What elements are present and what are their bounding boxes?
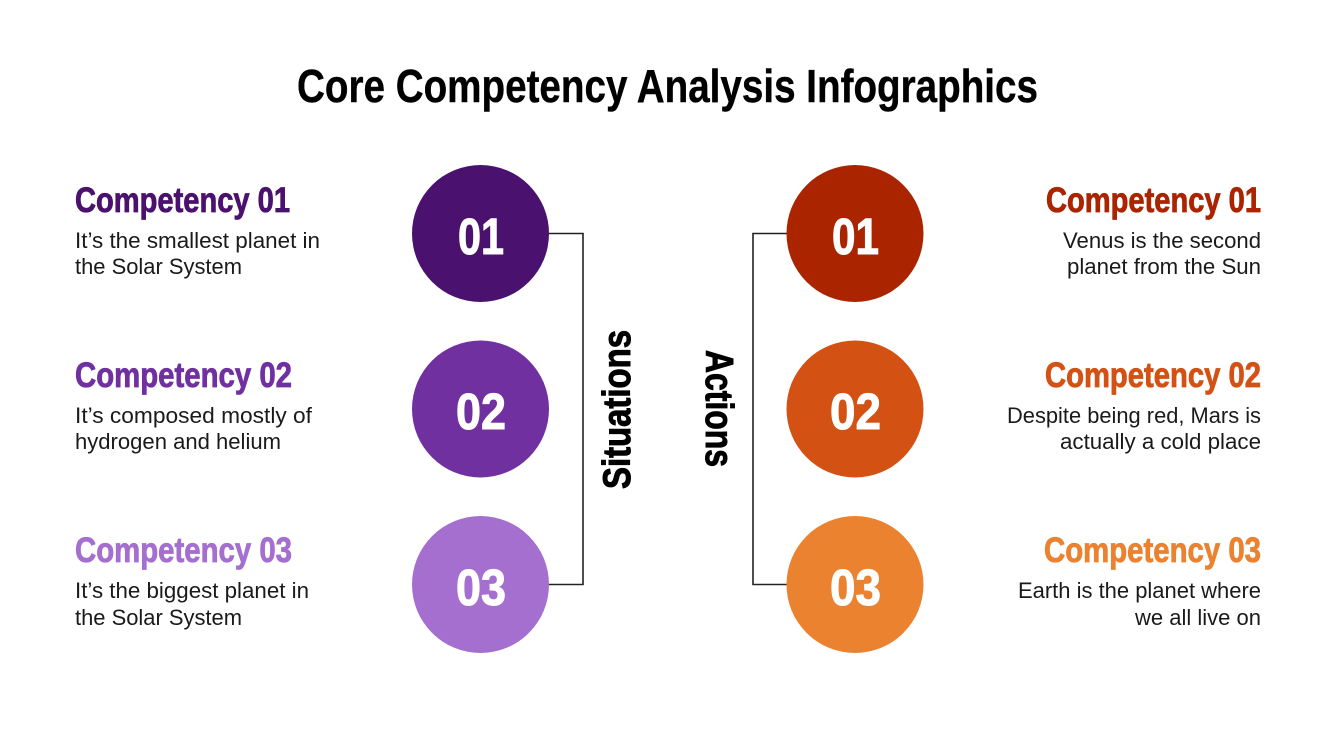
item: action 03 — [786, 516, 1261, 653]
number circle — [412, 340, 549, 478]
label: Situations: Situations — [596, 330, 639, 489]
description: the Solar System — [75, 605, 242, 630]
description — [1063, 228, 1261, 279]
description: Venus is the second — [1063, 228, 1261, 253]
number circle — [786, 165, 924, 302]
heading: Competency 01 — [75, 181, 290, 220]
description — [75, 228, 320, 279]
heading: Competency 03 — [1044, 531, 1261, 570]
number circle: 03 — [830, 559, 881, 616]
item: situation 01 — [75, 165, 549, 302]
number circle — [786, 340, 924, 478]
description: Despite being red, Mars is — [1007, 403, 1261, 428]
heading: Competency 02 — [1045, 356, 1261, 395]
title: Core Competency Analysis Infographics — [297, 60, 1038, 112]
bracket connector: actions — [753, 234, 787, 584]
heading: Competency 01 — [1046, 181, 1261, 220]
description: It’s composed mostly of — [75, 403, 313, 428]
description: actually a cold place — [1060, 429, 1261, 454]
description — [1018, 578, 1261, 630]
item: situation 03 — [75, 516, 549, 653]
description: hydrogen and helium — [75, 429, 281, 454]
label: Actions: Actions — [697, 350, 740, 467]
item: action 02 — [786, 340, 1261, 478]
item: action 01 — [786, 165, 1261, 302]
description: planet from the Sun — [1067, 254, 1261, 279]
description: we all live on — [1134, 605, 1261, 630]
number circle: 03 — [456, 559, 506, 616]
description: the Solar System — [75, 254, 242, 279]
description — [75, 578, 309, 630]
number circle: 01 — [832, 208, 879, 265]
description: It’s the biggest planet in — [75, 578, 309, 603]
number circle — [412, 165, 549, 302]
description: Earth is the planet where — [1018, 578, 1261, 603]
number circle — [412, 516, 549, 653]
panel: actions — [697, 165, 1261, 653]
item: situation 02 — [75, 340, 549, 478]
description: It’s the smallest planet in — [75, 228, 320, 253]
number circle — [786, 516, 924, 653]
description — [75, 403, 313, 454]
number circle: 02 — [830, 383, 881, 440]
heading: Competency 02 — [75, 356, 292, 395]
number circle: 02 — [456, 383, 506, 440]
heading: Competency 03 — [75, 531, 292, 570]
number circle: 01 — [458, 208, 504, 265]
description — [1007, 403, 1261, 454]
panel: situations — [75, 165, 639, 653]
bracket connector: situations — [549, 234, 583, 584]
